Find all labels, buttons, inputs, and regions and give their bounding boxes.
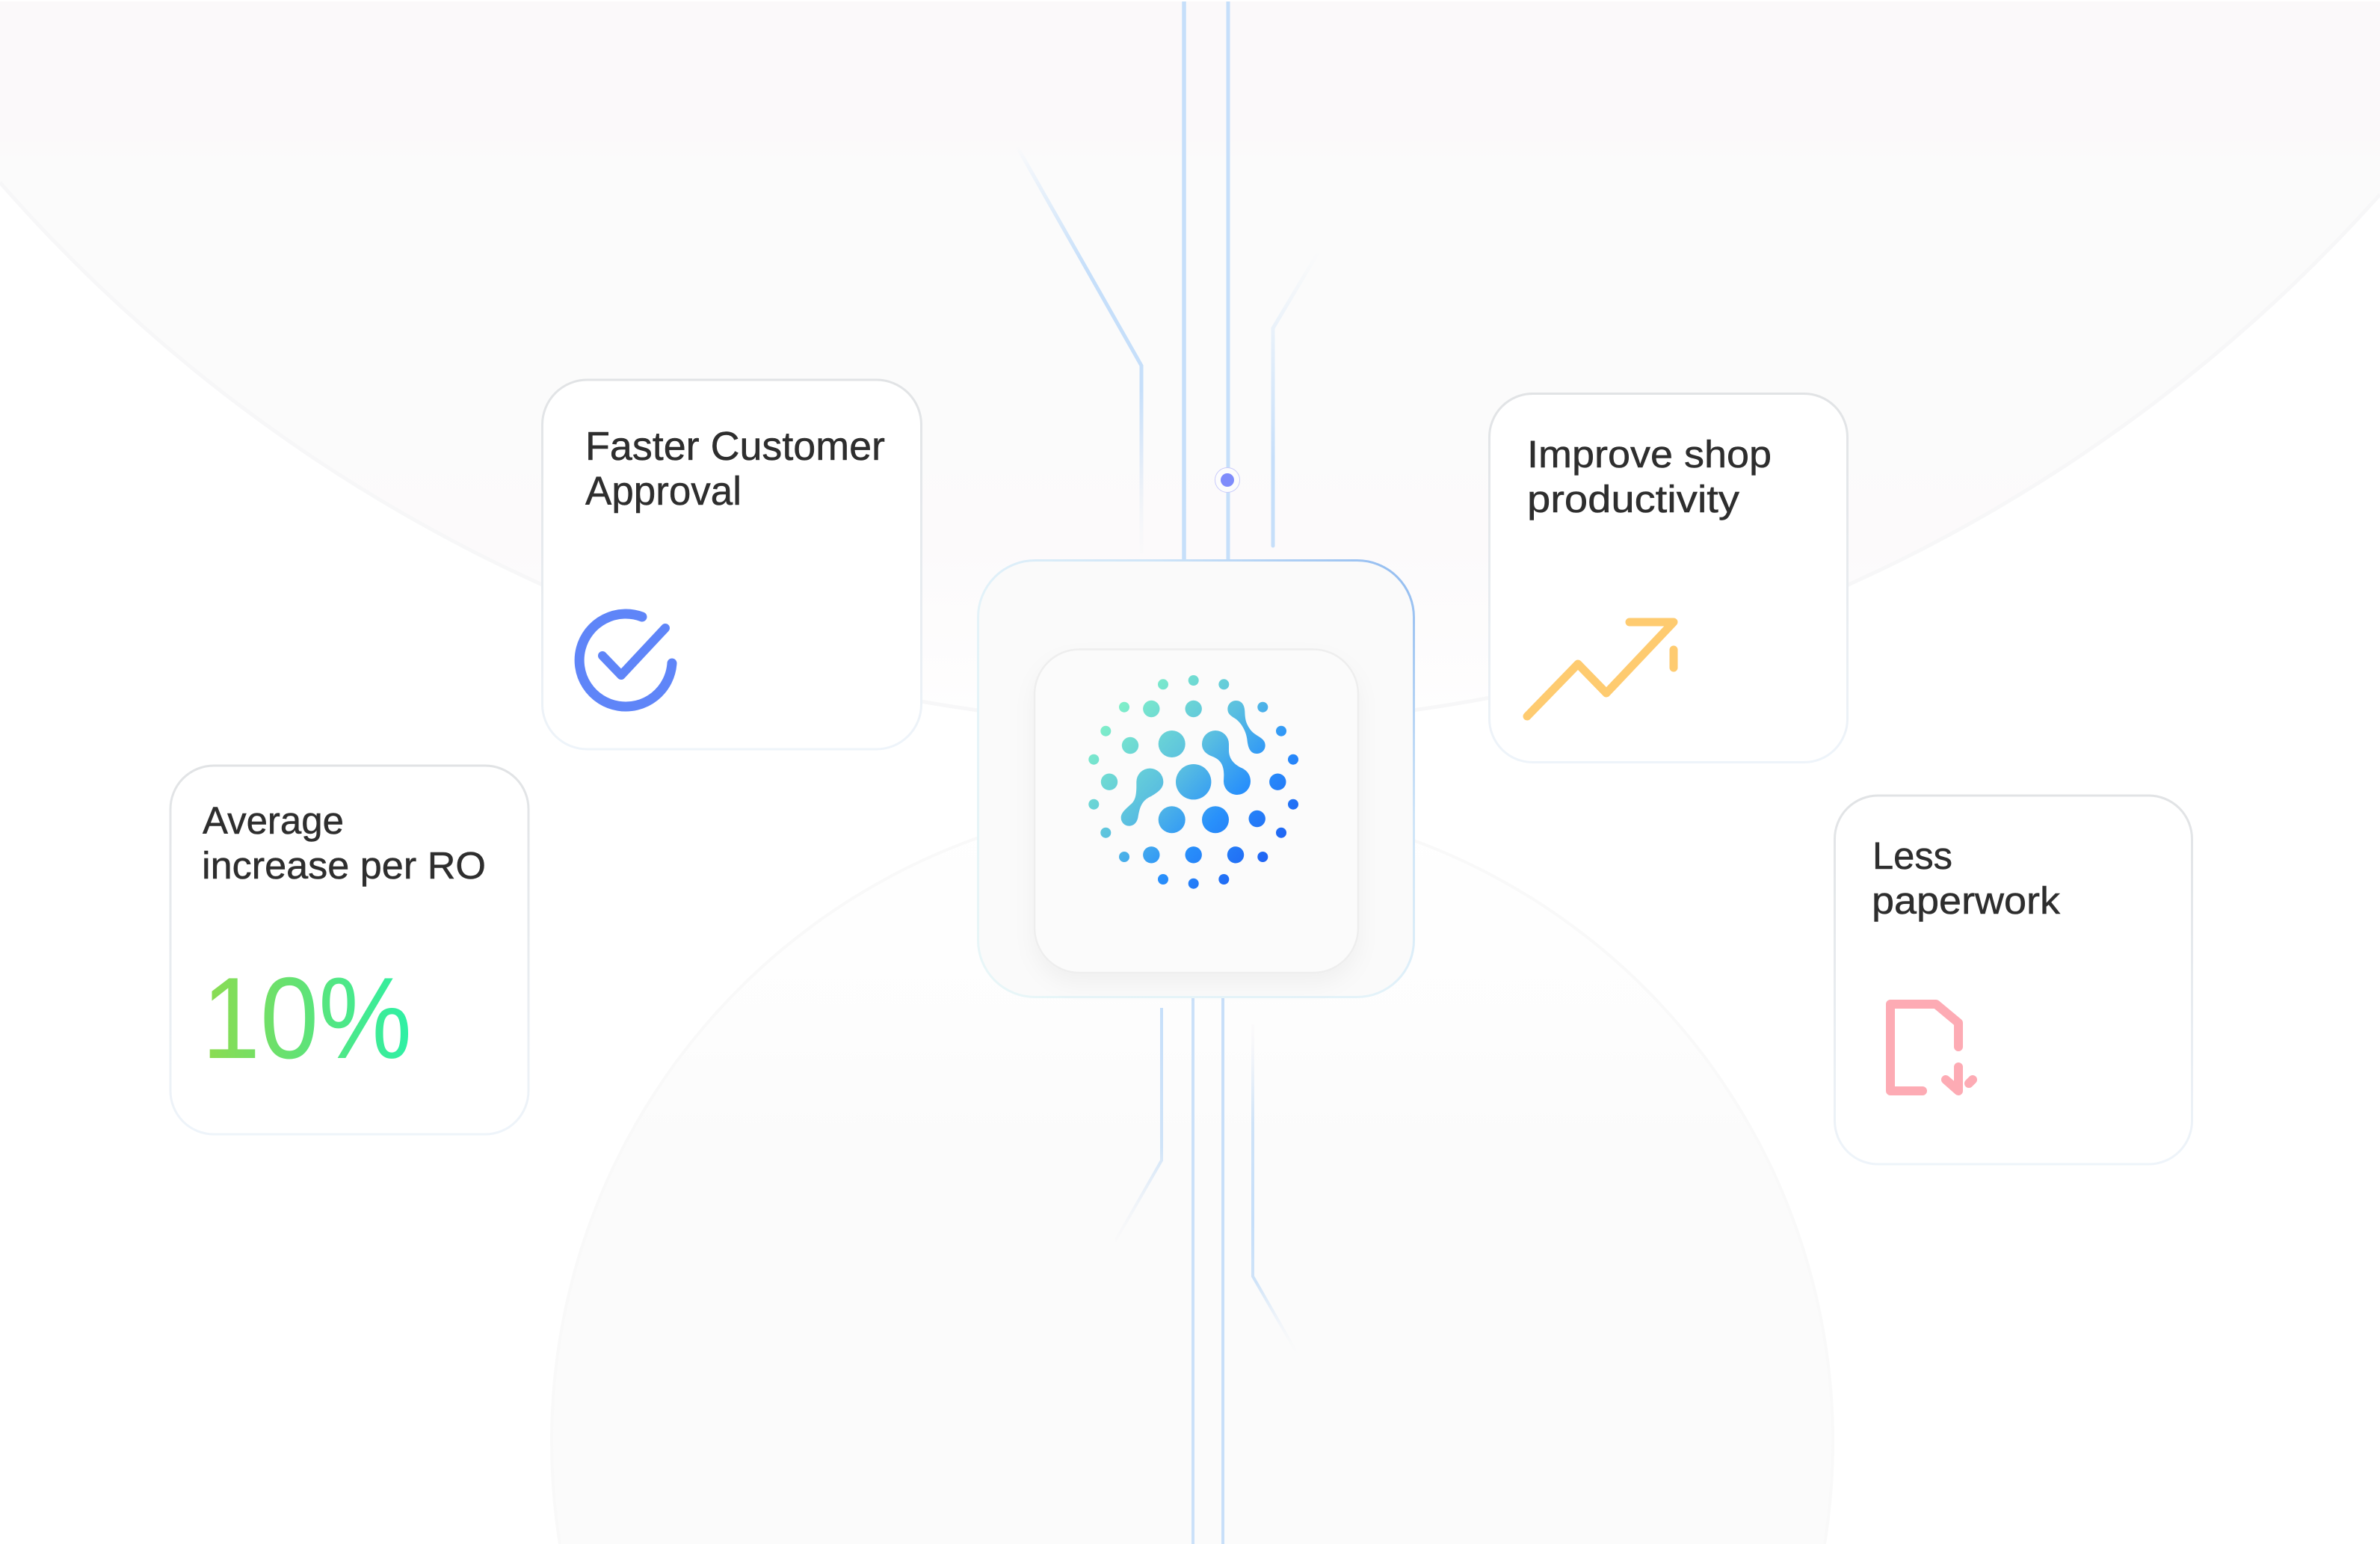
heading: Improve shop productivity: Improve shop — [1527, 433, 1772, 476]
icon: rising trend arrow — [1527, 622, 1674, 716]
heading: Faster Customer Approval: Approval — [585, 469, 742, 514]
connection node dot — [1215, 468, 1239, 492]
heading: Less paperwork: Less — [1872, 834, 1952, 877]
heading: Average increase per RO: Average — [203, 799, 344, 842]
background: lower circle — [552, 801, 1833, 1544]
panel: Less paperwork — [1834, 796, 2192, 1164]
icon: check mark in circle — [579, 614, 672, 707]
central hub panel — [978, 561, 1414, 997]
background: large top circle — [0, 1, 2380, 725]
heading: Improve shop productivity: productivity — [1527, 478, 1740, 520]
heading: Less paperwork: paperwork — [1872, 879, 2061, 922]
icon: dotted logo — [1088, 675, 1298, 889]
circuit lines below the hub — [1115, 998, 1298, 1544]
panel: Faster Customer Approval — [543, 380, 921, 749]
hub outer frame — [978, 561, 1414, 997]
stat: 10%: 10% — [202, 953, 412, 1083]
circuit lines above the hub — [1017, 1, 1319, 559]
hub inner tile — [1035, 649, 1358, 973]
panel: Improve shop productivity — [1489, 393, 1848, 763]
heading: Average increase per RO: increase per RO — [202, 844, 486, 887]
panel: Average increase per RO — [170, 766, 528, 1134]
heading: Faster Customer Approval: Faster Customer — [585, 424, 885, 469]
icon: document with down arrow — [1890, 1004, 1973, 1091]
